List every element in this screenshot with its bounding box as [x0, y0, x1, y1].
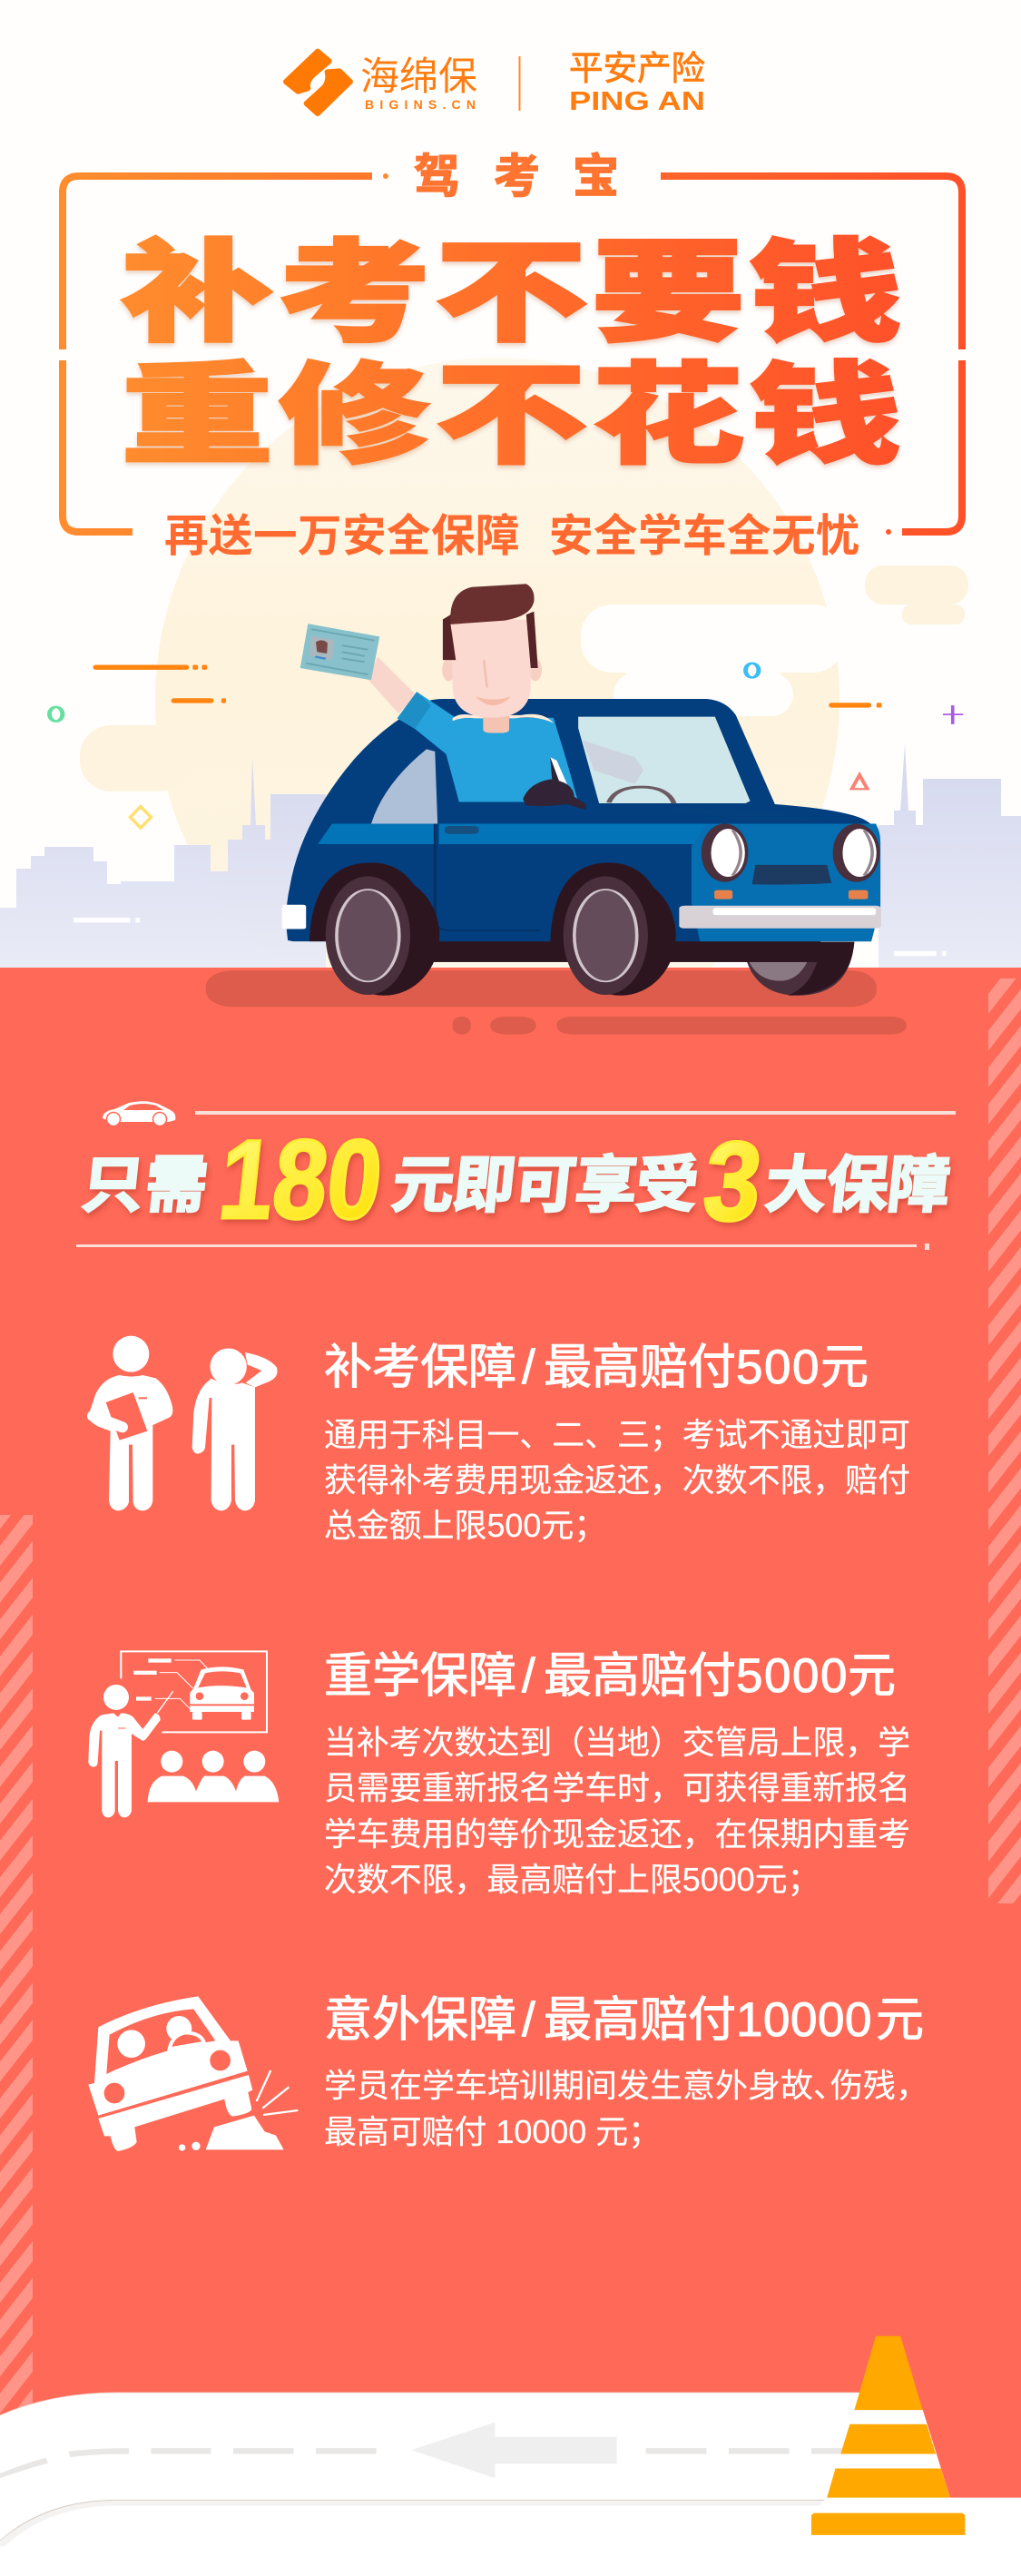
item 3 body: 学员在学车培训期间发生意外身故、伤残， — [324, 2068, 928, 2104]
heading: only 180 yuan for 3 guarantees: 元即可享受 — [388, 1151, 702, 1220]
heading: only 180 yuan for 3 guarantees: 大保障 — [761, 1151, 954, 1220]
heading: only 180 yuan for 3 guarantees: 180 — [213, 1116, 388, 1243]
neck — [483, 710, 509, 732]
title frame — [63, 176, 962, 532]
item 2 body — [324, 1725, 910, 1898]
windshield — [578, 717, 751, 803]
lane dashes — [0, 2448, 844, 2478]
icon: crashed car — [88, 1996, 298, 2151]
main title — [121, 231, 902, 478]
item 1 body: 通用于科目一、二、三；考试不通过即可 — [324, 1417, 910, 1453]
arrow — [411, 2423, 616, 2478]
front face — [692, 823, 880, 941]
title line 1: 补考不要钱 — [121, 231, 902, 356]
heading: only 180 yuan for 3 guarantees — [78, 1116, 954, 1244]
licence card — [300, 624, 379, 680]
partner latin name: PING AN — [569, 87, 705, 116]
item 1 title: 补考保障/最高赔付500元 — [324, 1341, 869, 1394]
item 2 title: 重学保障/最高赔付5000元 — [324, 1649, 896, 1703]
lower road edge — [0, 2500, 827, 2542]
bumper — [282, 905, 881, 929]
item 1 body: 获得补考费用现金返还，次数不限，赔付 — [324, 1462, 910, 1499]
steering wheel — [609, 787, 674, 803]
road surface — [0, 2393, 1021, 2576]
item 2: relearn guarantee — [88, 1649, 910, 1898]
item 3 title: 意外保障/最高赔付10000元 — [324, 1993, 924, 2047]
side stripe — [318, 823, 706, 844]
heading: only 180 yuan for 3 guarantees: 3 — [698, 1119, 768, 1244]
road and traffic cone — [0, 2336, 1021, 2576]
door handle — [445, 826, 478, 834]
speed lines and small shapes — [50, 664, 963, 956]
item 3 body: 最高可赔付 10000 元； — [324, 2114, 661, 2150]
brand name: 海绵保 — [360, 55, 477, 99]
traffic cone — [811, 2336, 965, 2535]
driver — [300, 584, 578, 802]
item 2 body: 员需要重新报名学车时，可获得重新报名 — [324, 1770, 910, 1806]
item 2 body: 当补考次数达到（当地）交管局上限，学 — [324, 1725, 910, 1761]
hair — [443, 615, 456, 660]
decorative stripes right — [988, 978, 1021, 1903]
item 2 body: 学车费用的等价现金返还，在保期内重考 — [324, 1816, 910, 1853]
subtitle: 再送一万安全保障安全学车全无忧 — [164, 512, 860, 561]
item 3 body — [324, 2068, 928, 2150]
section heading group — [76, 1101, 956, 1250]
road marks — [453, 1017, 907, 1035]
grille — [752, 865, 831, 885]
heading: only 180 yuan for 3 guarantees: 只需 — [78, 1151, 211, 1220]
sun backdrop — [155, 358, 839, 1042]
illustration: driver in car holding licence — [50, 584, 963, 1035]
panel: red lower section — [0, 968, 1021, 2576]
headlights — [702, 823, 879, 882]
ears — [442, 658, 456, 681]
item 1: exam retake guarantee — [88, 1336, 910, 1544]
item 1 body — [324, 1417, 910, 1544]
shirt — [398, 692, 578, 802]
panel: page background — [0, 0, 1021, 968]
brand url: BIGINS.CN — [365, 97, 476, 112]
city skyline — [0, 744, 1021, 968]
partner name: 平安产险 — [569, 49, 705, 87]
car shadow — [206, 970, 877, 1007]
hood — [654, 808, 827, 822]
arm — [368, 657, 417, 713]
face — [451, 619, 531, 718]
front wheel — [550, 862, 676, 996]
logo: haimianbao and ping an — [286, 49, 705, 116]
icon: teacher and students — [88, 1651, 279, 1817]
rear wheel — [309, 862, 439, 996]
decorative stripes left — [0, 1515, 33, 2418]
kicker: jiakaobao: 驾考宝 — [414, 151, 619, 202]
collar — [453, 714, 554, 723]
item 2 body: 次数不限，最高赔付上限5000元； — [324, 1862, 820, 1898]
icon: logo mark — [286, 52, 350, 113]
rear side window — [371, 749, 437, 823]
underbody — [391, 939, 820, 962]
item 3: accident guarantee — [88, 1993, 928, 2151]
clouds — [80, 565, 968, 791]
far wheel — [742, 942, 854, 996]
indicators — [714, 890, 732, 900]
item 1 body: 总金额上限500元； — [324, 1508, 606, 1544]
door seam — [435, 823, 541, 930]
icon: small car — [103, 1101, 175, 1126]
icon: two figures — [88, 1336, 278, 1510]
title line 2: 重修不花钱 — [121, 354, 902, 478]
seat belt and hand — [523, 757, 586, 810]
car body — [286, 699, 880, 941]
frame dots — [383, 173, 891, 535]
